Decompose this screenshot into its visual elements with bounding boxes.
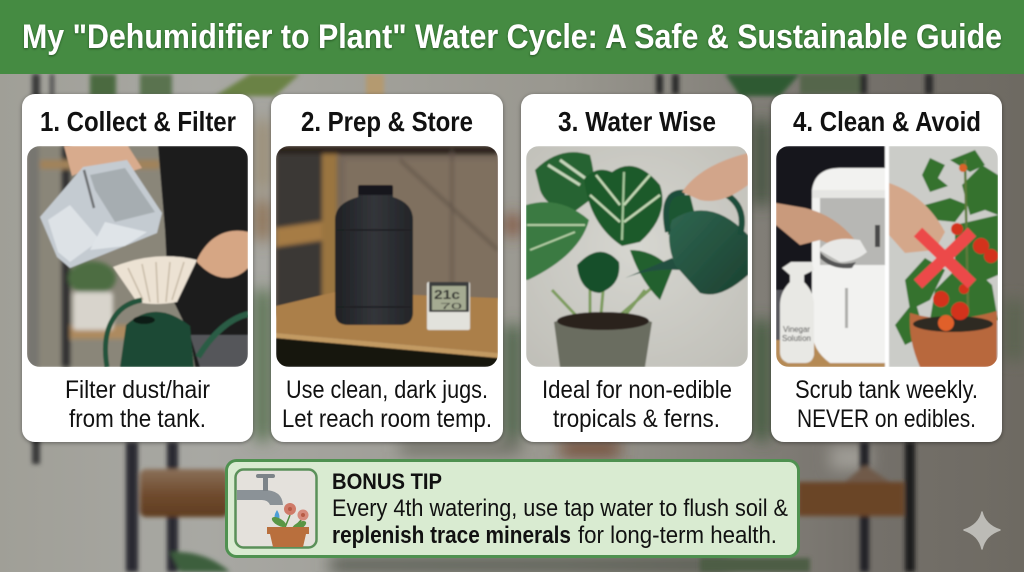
- photo: dark jug and thermometer on shelf: 70: [440, 302, 463, 311]
- bonus tip body: [332, 495, 788, 549]
- title banner: [0, 0, 1024, 74]
- photo: watering a monstera: [526, 146, 748, 367]
- heading: step 3: 3. Water Wise: [558, 106, 716, 137]
- caption: step 1: Filter dust/hair: [65, 376, 210, 404]
- caption: step 2: Use clean, dark jugs.: [286, 376, 488, 404]
- caption: step 3: [542, 376, 732, 433]
- icon: tap dripping onto potted flowers: [236, 470, 316, 548]
- caption: step 2: Let reach room temp.: [282, 405, 492, 433]
- heading: step 1: 1. Collect & Filter: [40, 106, 236, 137]
- bonus tip body: replenish trace minerals: [332, 522, 571, 549]
- photo: dark jug and thermometer on shelf: 21c: [434, 287, 460, 302]
- panel: step 4 clean and avoid: [771, 94, 1002, 442]
- panel: step 2 prep and store: [271, 94, 503, 442]
- heading: step 2: 2. Prep & Store: [301, 106, 473, 137]
- caption: step 4: Scrub tank weekly.: [795, 376, 978, 404]
- caption: step 1: from the tank.: [69, 405, 206, 433]
- photo: scrubbing tank with vinegar and crossed-out tomato plant: [776, 146, 998, 367]
- panel: step 3 water wise: [521, 94, 752, 442]
- heading: step 4: 4. Clean & Avoid: [793, 106, 981, 137]
- caption: step 1: [65, 376, 210, 433]
- callout: bonus tip: [226, 460, 798, 556]
- caption: step 4: [795, 376, 978, 433]
- panel: step 1 collect and filter: [22, 94, 253, 442]
- caption: step 4: NEVER on edibles.: [797, 405, 976, 433]
- caption: step 3: tropicals & ferns.: [553, 405, 720, 433]
- caption: step 3: Ideal for non-edible: [542, 376, 732, 404]
- bonus tip body: Every 4th watering, use tap water to flush soil &: [332, 495, 788, 522]
- icon: sparkle watermark: [964, 512, 1000, 549]
- bonus tip heading: BONUS TIP: [332, 469, 442, 494]
- photo: dark jug and thermometer on shelf: [276, 146, 498, 367]
- photo: pouring water through a coffee filter: [27, 146, 248, 367]
- caption: step 2: [282, 376, 492, 433]
- photo: scrubbing tank with vinegar and crossed-out tomato plant: Vinegar: [783, 325, 810, 334]
- bonus tip body: for long-term health.: [578, 522, 777, 549]
- photo: scrubbing tank with vinegar and crossed-out tomato plant: Solution: [782, 334, 811, 343]
